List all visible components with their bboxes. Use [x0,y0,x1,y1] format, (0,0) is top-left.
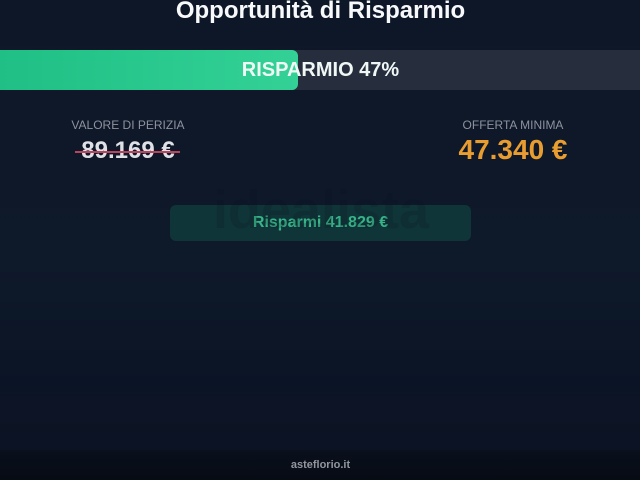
strikethrough line [75,151,180,153]
progress bar fill [0,50,298,90]
progress bar label: RISPARMIO 47% [242,59,399,81]
minimum offer label: OFFERTA MINIMA [463,118,563,132]
appraisal value block [71,118,185,164]
savings callout text: Risparmi 41.829 € [253,214,388,231]
minimum offer amount: 47.340 € [458,134,568,165]
savings callout [170,205,471,241]
appraisal amount, struck through: 89.169 € [81,137,175,164]
progress bar: savings 47% [0,50,640,90]
watermark: idealista [213,180,429,240]
appraisal label: VALORE DI PERIZIA [71,118,185,132]
footer [0,450,640,480]
minimum offer block [458,118,568,165]
footer site name: asteflorio.it [291,459,350,471]
